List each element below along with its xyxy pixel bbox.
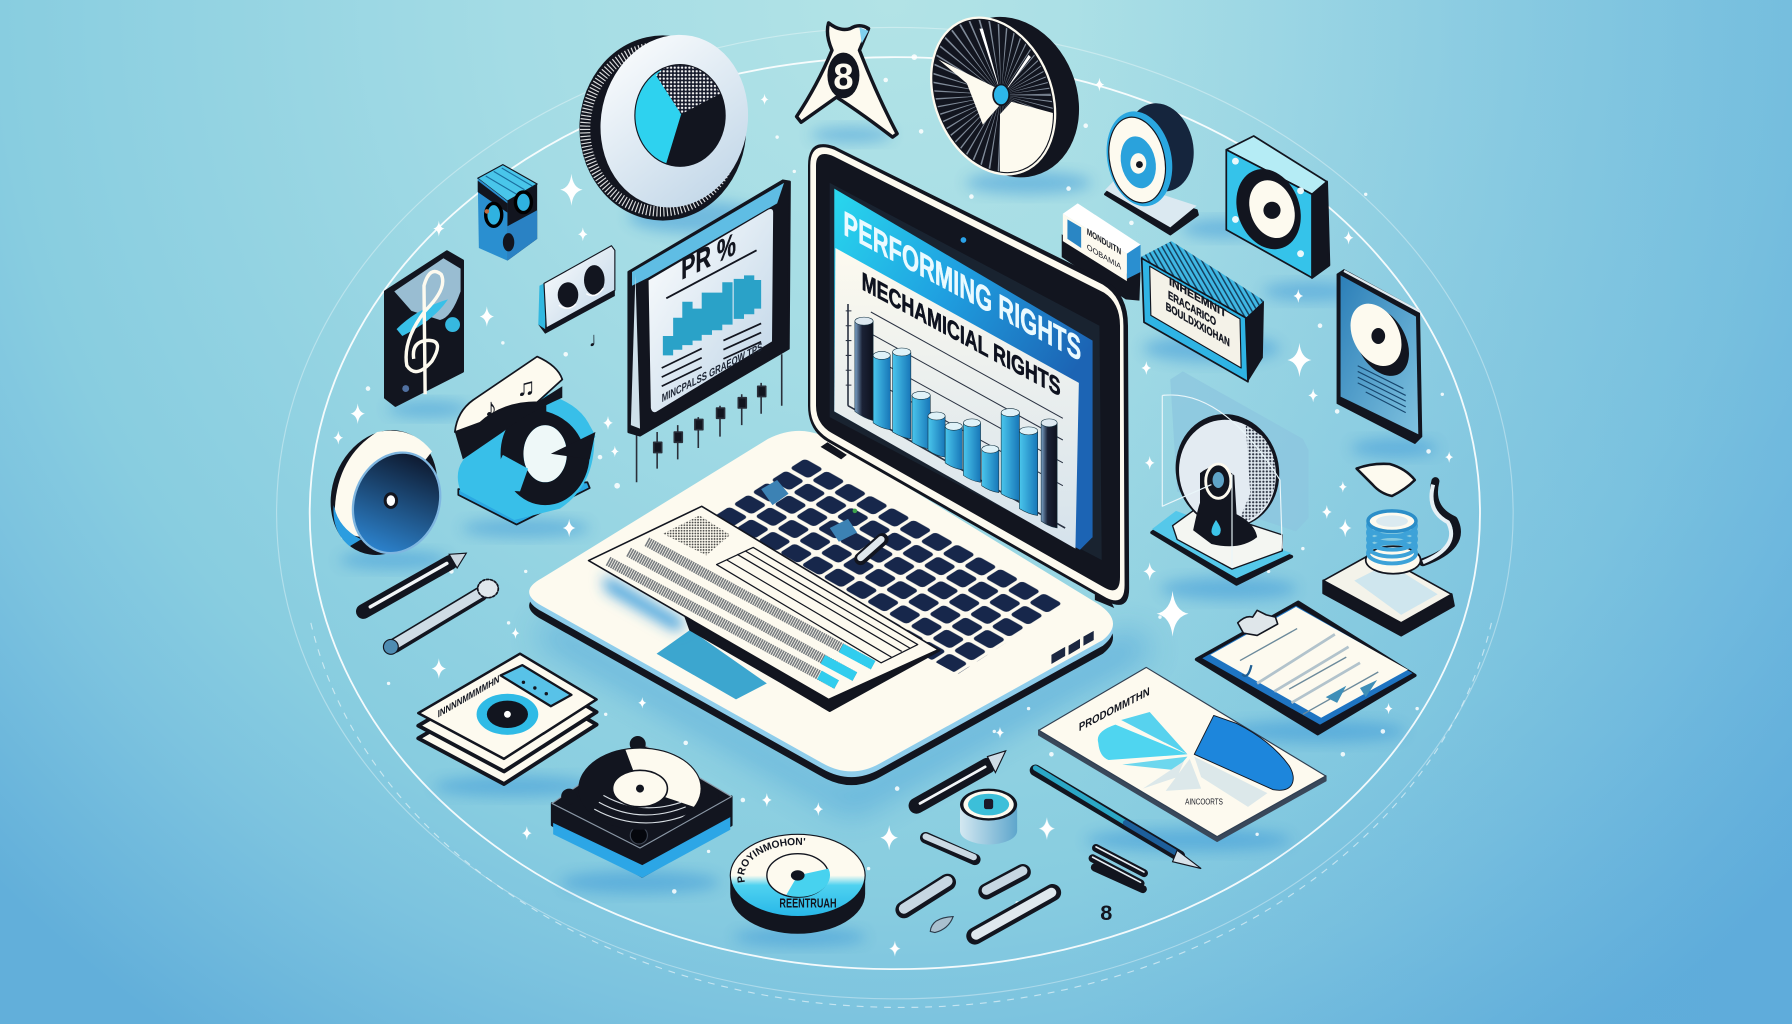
paper shadow [603,575,686,631]
icon: square speaker box [1226,136,1329,278]
trackpad [657,630,767,699]
panel: PR percentage board [629,181,790,482]
icon: treble clef card [385,251,463,406]
soft shadows [339,127,1438,946]
label card small: MONDUITN [1087,227,1121,258]
chart report book: AINCOORTS [1185,798,1223,807]
icon: disc with label text [690,806,904,934]
icon: round button [960,789,1017,845]
orbit rings [277,27,1513,1007]
icon: triangle badge with number 8 [797,23,897,137]
PR bar chart [663,275,761,355]
icon: short black pen [917,751,1006,806]
icon: glass record player [1152,371,1309,584]
label card large: ERACARICO [1168,288,1216,329]
panel: laptop [529,144,1129,785]
laptop screen lid [808,144,1129,605]
icon: webcam speaker [1098,97,1202,234]
icon: stacked music cards [418,654,597,784]
icon: coil teapot on platform [1323,464,1457,635]
label card large: BOULDXXIOHAN [1166,300,1230,350]
paper clip on keyboard [861,539,882,559]
icon: record turntable [552,736,731,878]
panel: PR percentage board: PR % [681,226,736,287]
icon: pen caps and small parts [904,837,1144,936]
icon: disc with label text: REENTRUAH [779,896,837,910]
label card small [1062,203,1141,301]
paper sheet [589,506,939,711]
legs and sliders [637,354,782,482]
icon: round wall speaker [312,414,456,571]
keyboard [691,456,1066,674]
icon: music note loop: ♪ [485,394,497,422]
icon: black pen [363,553,466,611]
icon: small number 8: 8 [1100,900,1112,925]
icon: music note loop [455,357,595,525]
icon: socket plate [538,246,615,334]
icon: disc with label text: PROYINMOHON' [737,838,806,883]
label card large [1141,241,1264,382]
laptop base [529,445,1113,785]
hinge [821,442,1114,608]
laptop screen lid: MECHAMICIAL RIGHTS [862,267,1061,402]
panel: PR percentage board: MINCPALSS GRAEOW TPS [662,340,762,405]
note small glyph: ♩ [589,328,609,351]
icon: fan wheel disc [930,16,1080,178]
icon: cube speaker [478,165,537,261]
icon: silver microphone [383,579,498,654]
icon: long teal pen [1035,768,1201,869]
chart panel [834,248,1079,549]
icon: stacked music cards: INNNNMMMMHN [438,674,499,720]
icon: pie disc [579,34,748,221]
icon: poster with disc [1337,270,1422,443]
label card large: INHEEMNIT [1169,274,1227,321]
chart report book [1039,667,1326,841]
sparkles [333,78,1453,957]
label card small: OOBAMIA [1087,242,1121,272]
icon: clipboard [1197,602,1415,734]
icon: triangle badge with number 8: 8 [833,56,854,97]
screen banner [834,189,1093,550]
laptop screen lid: PERFORMING RIGHTS [843,203,1081,369]
icon: music note loop: ♫ [517,373,535,401]
screen bar chart [855,317,1057,528]
tiny particles [341,54,1444,905]
side ports [1051,631,1094,664]
chart report book: PRODOMMTHN [1079,684,1150,734]
